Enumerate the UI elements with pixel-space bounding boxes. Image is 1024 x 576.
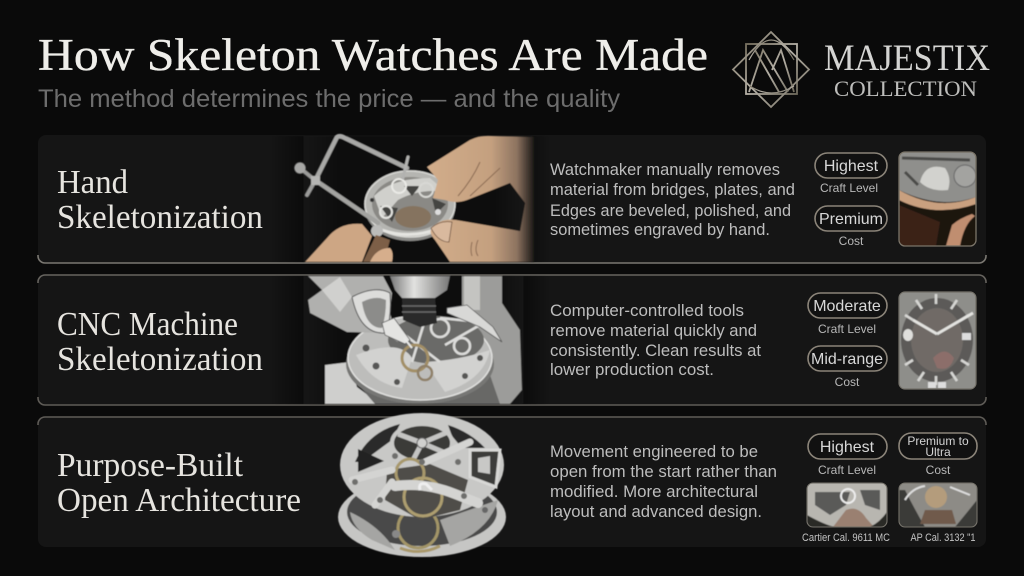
main spindle: [390, 276, 450, 327]
curved clamp: [447, 305, 502, 342]
panel 2 description: lower production cost.: [550, 360, 714, 379]
rotary table with skeleton plate: [346, 316, 494, 404]
panel 3 heading: Purpose-Built: [57, 447, 244, 484]
watch photo frame: [899, 152, 976, 246]
cost badge: Ultra: [925, 445, 951, 459]
right hand: [427, 136, 534, 262]
logo subline: COLLECTION: [834, 76, 977, 101]
cost badge: Mid-range: [811, 351, 883, 368]
craft level badge: [808, 434, 887, 477]
jeweller's saw: [294, 136, 408, 237]
panel 1 description: Edges are beveled, polished, and: [550, 201, 791, 220]
title: How Skeleton Watches Are Made: [38, 30, 708, 80]
panel: hand skeletonization: [38, 135, 986, 263]
angled head with tool: [308, 276, 412, 348]
craft level badge: [815, 153, 887, 195]
panel 1 description: sometimes engraved by hand.: [550, 220, 770, 239]
cost badge: Cost: [839, 234, 864, 248]
panel 1 description: Watchmaker manually removes: [550, 160, 780, 179]
illustration: hands skeletonizing a movement with a saw: [270, 136, 550, 262]
panel 1 heading: Hand: [57, 164, 128, 201]
upper skeleton bridge: [340, 413, 504, 520]
watch photo: rose gold skeleton watch: [899, 152, 976, 246]
panel 3 description: open from the start rather than: [550, 462, 777, 481]
craft level badge: Craft Level: [820, 181, 878, 195]
craft level badge: Highest: [824, 158, 879, 175]
panel 2 description: remove material quickly and: [550, 321, 757, 340]
panel: CNC machine skeletonization: [38, 275, 986, 405]
craft level badge: Craft Level: [818, 463, 876, 477]
craft level badge: Highest: [820, 439, 875, 456]
machine column: [440, 276, 522, 404]
panel 3 description: modified. More architectural: [550, 482, 758, 501]
panel 2 heading: CNC Machine: [57, 306, 238, 343]
craft level badge: Craft Level: [818, 322, 876, 336]
cost badge: Premium to: [907, 434, 969, 448]
cost badge: [899, 433, 977, 477]
panel 3 description: layout and advanced design.: [550, 502, 762, 521]
panel 2 description: Computer-controlled tools: [550, 301, 744, 320]
panel 3 background: [38, 417, 986, 547]
movement photo: Cartier Cal. 9611 MC: [802, 483, 890, 544]
craft level badge: [808, 293, 887, 336]
panel 3 heading: Open Architecture: [57, 482, 301, 519]
movement photo: AP Cal. 3132: [899, 483, 977, 544]
subtitle: The method determines the price — and the quality: [38, 85, 621, 113]
panel 1 heading: Skeletonization: [57, 199, 263, 236]
craft level badge: Moderate: [813, 298, 881, 315]
panel 2 heading: Skeletonization: [57, 341, 263, 378]
cost badge: [815, 206, 887, 248]
cost badge: [808, 346, 887, 389]
illustration: CNC milling machine: [270, 276, 550, 404]
cost badge: Premium: [819, 211, 883, 228]
panel 1 background: [38, 135, 986, 263]
watch movement: [365, 171, 455, 241]
machine base: [325, 362, 380, 404]
watch photo: skeleton dial: [899, 292, 976, 389]
cost badge: Cost: [835, 375, 860, 389]
panel 1 description: material from bridges, plates, and: [550, 180, 795, 199]
left hand with handle: [305, 224, 393, 262]
panel: purpose-built open architecture: [38, 413, 986, 557]
logo emblem: [733, 32, 809, 107]
cost badge: Cost: [926, 463, 951, 477]
panel 2 description: consistently. Clean results at: [550, 341, 761, 360]
logo: Majestix Collection: [733, 32, 990, 107]
panel 2 background: [38, 275, 986, 405]
logo wordmark: MAJESTIX: [824, 38, 990, 79]
panel 3 description: Movement engineered to be: [550, 442, 758, 461]
movement photo: AP Cal. 3132: AP Cal. 3132 "1: [910, 532, 976, 544]
illustration: open architecture movement: [338, 413, 506, 557]
lower plate: [338, 477, 506, 557]
watch photo frame: [899, 292, 976, 389]
movement photo: Cartier Cal. 9611 MC: Cartier Cal. 9611 MC: [802, 532, 890, 544]
